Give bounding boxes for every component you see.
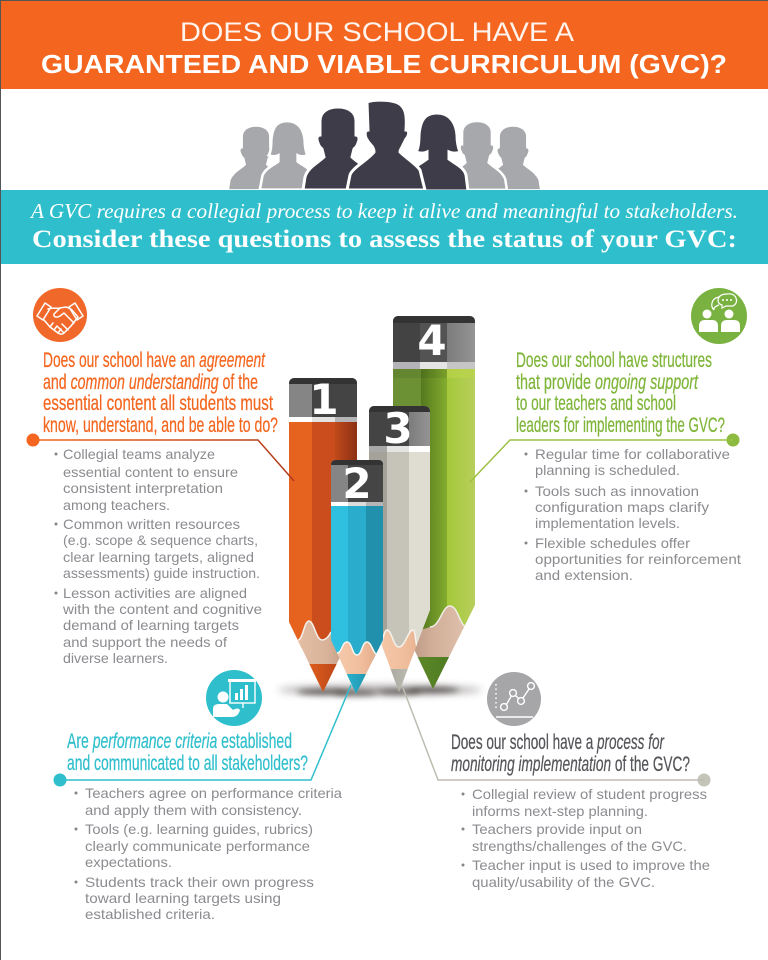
bullet list: configuration maps clarify	[535, 499, 709, 515]
teal intro band: A GVC requires a collegial process to keep it alive and meaningful to stakeholders.	[29, 199, 738, 223]
heading	[43, 349, 278, 437]
bullet list: consistent interpretation	[63, 480, 223, 496]
bullet list: Collegial review of student progress	[472, 786, 707, 802]
pencil 1 (orange)	[289, 378, 357, 692]
bullet list: assessments) guide instruction.	[63, 565, 260, 581]
heading: monitoring implementation of the GVC?	[451, 753, 690, 776]
connector line to pencil 3	[403, 688, 710, 786]
teal intro band	[0, 190, 768, 264]
bullet list: diverse learners.	[63, 650, 168, 666]
pencil 1 (orange): 1	[309, 375, 339, 424]
bullet list: clear learning targets, aligned	[63, 549, 254, 565]
connector line to pencil 4	[470, 434, 740, 482]
panel: ongoing support structures	[470, 288, 747, 583]
title banner: GUARANTEED AND VIABLE CURRICULUM (GVC)?	[41, 49, 727, 79]
bullet list	[74, 785, 342, 922]
bullet list: Tools (e.g. learning guides, rubrics)	[85, 821, 313, 837]
bullet list: planning is scheduled.	[535, 462, 680, 478]
panel: monitoring implementation	[403, 672, 710, 890]
pencil 3 (grey): 3	[383, 404, 413, 453]
bullet list: with the content and cognitive	[62, 601, 262, 617]
icon: handshake	[33, 288, 87, 342]
bullet list: and support the needs of	[63, 634, 227, 650]
heading	[516, 349, 725, 437]
heading: and common understanding of the	[43, 371, 258, 394]
bullet list: established criteria.	[85, 906, 215, 922]
heading: to our teachers and school	[516, 392, 676, 415]
heading: essential content all students must	[43, 392, 273, 415]
pencil 2 (blue)	[330, 459, 384, 700]
icon: group of people silhouettes	[228, 100, 541, 191]
pencil 3 (grey)	[369, 406, 430, 692]
bullet list: Flexible schedules offer	[535, 535, 690, 551]
bullet list: Common written resources	[63, 516, 240, 532]
bullet list	[524, 446, 741, 583]
icon: presenter with chart	[206, 670, 262, 726]
pencil 4 (green)	[393, 316, 475, 689]
heading: Does our school have an agreement	[43, 349, 266, 372]
icon: two people talking	[691, 288, 747, 344]
bullet list: Teachers agree on performance criteria	[85, 785, 342, 801]
icon: line chart	[487, 672, 541, 726]
bullet list: Tools such as innovation	[535, 483, 699, 499]
bullet list: demand of learning targets	[63, 617, 239, 633]
bullet list: informs next-step planning.	[472, 803, 648, 819]
bullet list: implementation levels.	[535, 515, 680, 531]
bullet list: Lesson activities are aligned	[63, 585, 247, 601]
bullet list: essential content to ensure	[63, 464, 238, 480]
teal intro band: Consider these questions to assess the status of your GVC:	[32, 224, 737, 253]
bullet list: and apply them with consistency.	[85, 802, 302, 818]
bullet list: (e.g. scope & sequence charts,	[63, 532, 258, 548]
bullet list: expectations.	[85, 854, 172, 870]
heading: that provide ongoing support	[516, 371, 699, 394]
pencil 4 (green): 4	[417, 316, 447, 365]
connector line to pencil 2	[54, 685, 351, 786]
bullet list	[462, 786, 710, 890]
bullet list: Students track their own progress	[85, 874, 314, 890]
heading: Does our school have a process for	[451, 731, 665, 754]
bullet list: clearly communicate performance	[85, 838, 310, 854]
heading	[451, 731, 690, 776]
heading: Are performance criteria established	[67, 730, 292, 753]
pencil shadow	[278, 685, 482, 696]
bullet list: strengths/challenges of the GVC.	[472, 838, 687, 854]
pencil 2 (blue): 2	[342, 459, 372, 508]
title banner	[0, 0, 768, 90]
bullet list: Teacher input is used to improve the	[472, 857, 710, 873]
connector line to pencil 1	[26, 434, 294, 481]
bullet list: Teachers provide input on	[472, 821, 642, 837]
bullet list: quality/usability of the GVC.	[472, 874, 655, 890]
heading: know, understand, and be able to do?	[43, 414, 278, 437]
bullet list: Regular time for collaborative	[535, 446, 730, 462]
panel: agreement and common understanding	[26, 288, 294, 666]
bullet list: and extension.	[535, 567, 633, 583]
bullet list: Collegial teams analyze	[63, 446, 215, 462]
bullet list	[54, 446, 262, 666]
bullet list: toward learning targets using	[85, 890, 281, 906]
panel: performance criteria	[54, 670, 351, 922]
title banner: DOES OUR SCHOOL HAVE A	[180, 17, 574, 47]
bullet list: opportunities for reinforcement	[535, 551, 741, 567]
heading: and communicated to all stakeholders?	[67, 752, 308, 775]
heading	[67, 730, 308, 775]
bullet list: among teachers.	[63, 497, 170, 513]
